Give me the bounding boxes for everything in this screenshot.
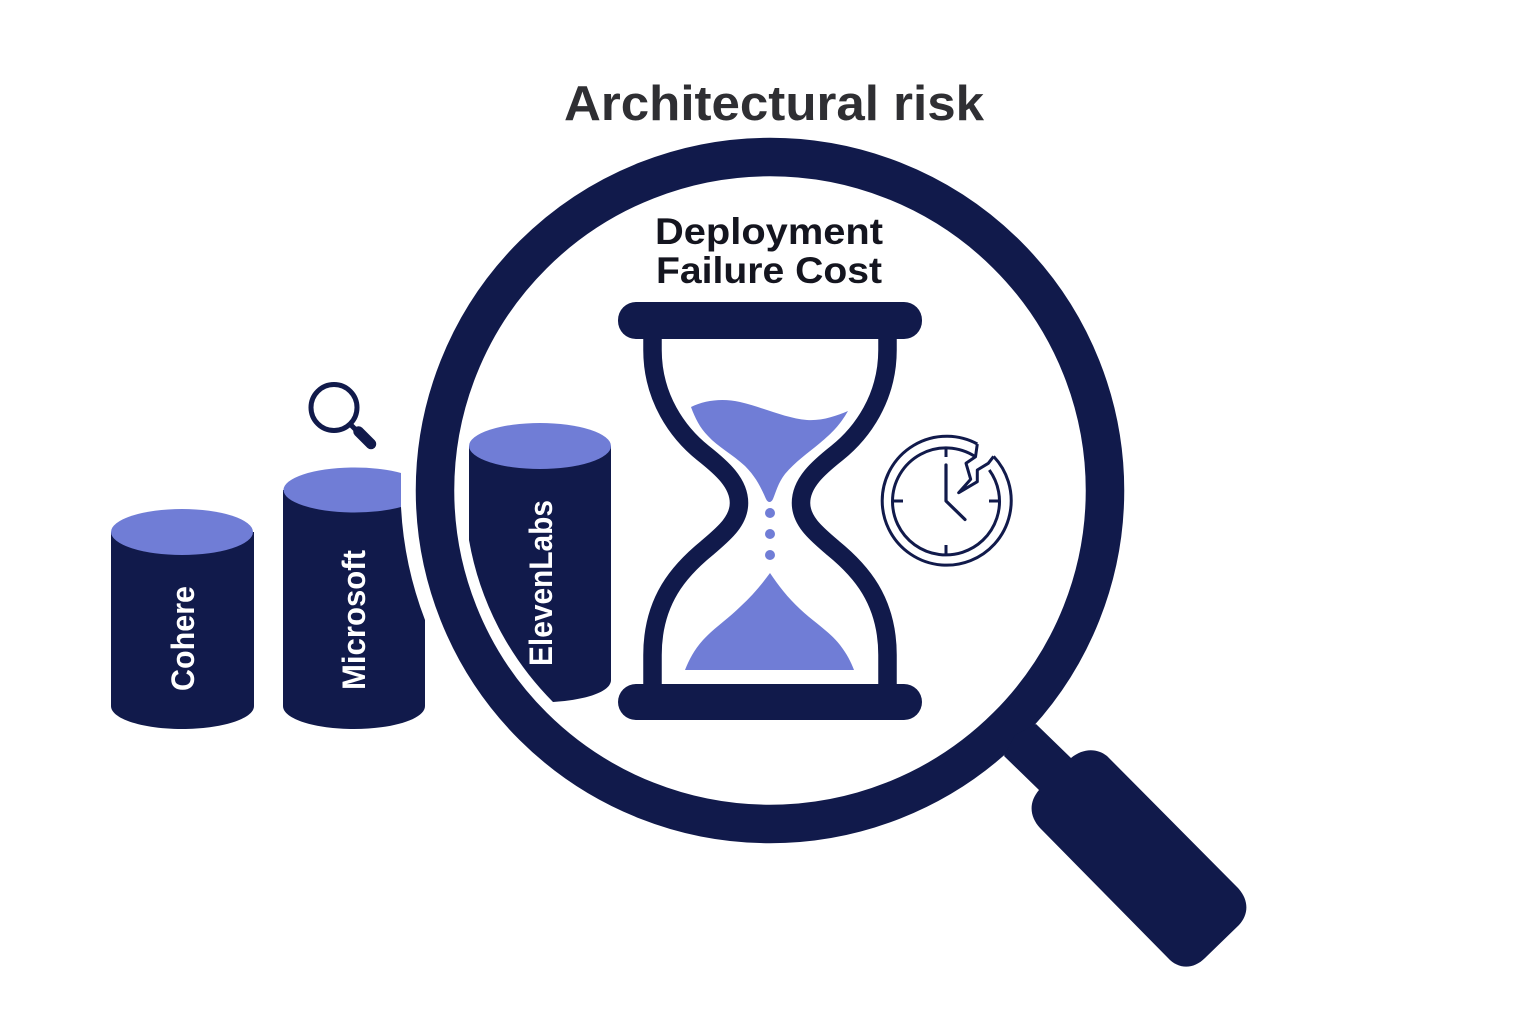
heading: Deployment Failure Cost: Deployment xyxy=(655,211,883,252)
icon: small magnifying glass xyxy=(311,384,371,444)
heading: Deployment Failure Cost xyxy=(655,211,883,291)
icon: hourglass xyxy=(618,302,922,720)
cylinder: ElevenLabs xyxy=(469,423,611,702)
cylinder: Microsoft: Microsoft xyxy=(336,550,372,690)
cylinder: Cohere: Cohere xyxy=(165,586,201,691)
cylinder: Microsoft xyxy=(283,468,425,729)
cylinder: Cohere xyxy=(111,509,254,729)
heading: Deployment Failure Cost: Failure Cost xyxy=(656,250,882,291)
title: Architectural risk xyxy=(564,77,985,131)
cylinder: ElevenLabs: ElevenLabs xyxy=(523,500,559,666)
icon: cracked clock xyxy=(882,436,1011,565)
large magnifying glass xyxy=(435,157,1246,967)
